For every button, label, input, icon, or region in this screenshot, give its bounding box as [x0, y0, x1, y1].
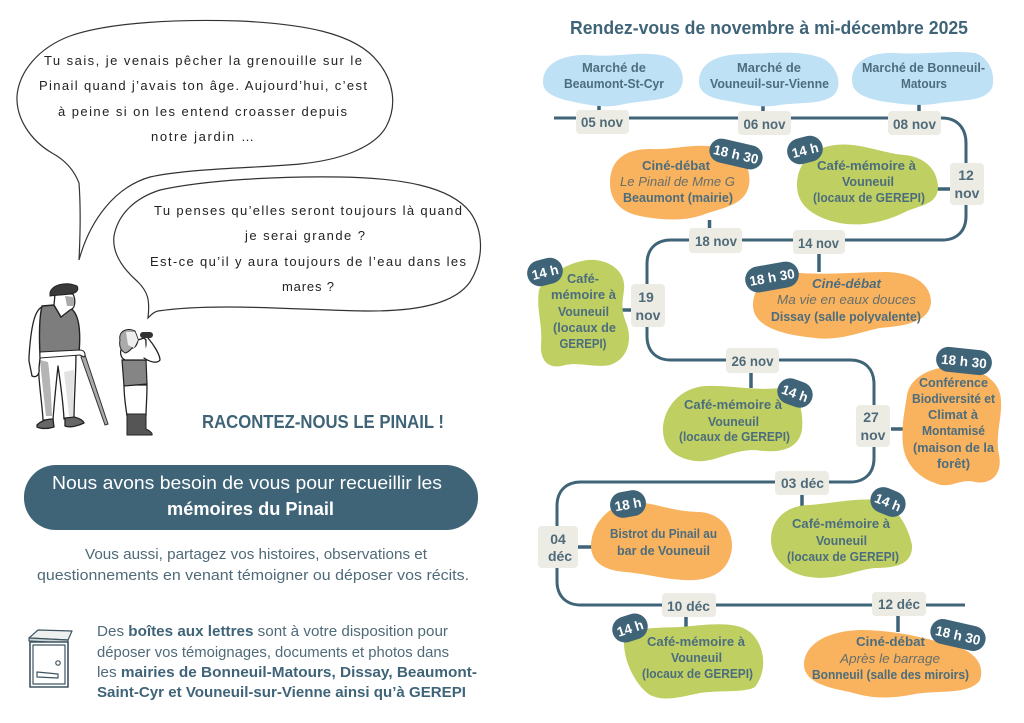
event: café-mémoire 03 déc: Café-mémoire à — [792, 516, 891, 531]
event: café-mémoire 12 nov: Vouneuil — [842, 174, 894, 189]
event: café-mémoire 03 déc: (locaux de GEREPI) — [787, 549, 899, 564]
date labels: déc — [548, 548, 572, 564]
event: ciné-débat Le Pinail de Mme G: 18 h 30 — [712, 142, 760, 167]
date labels: 05 nov — [581, 114, 623, 130]
date labels: 03 déc — [781, 475, 824, 491]
event: marché de Vouneuil: Vouneuil-sur-Vienne — [710, 76, 829, 91]
icon: letter box — [29, 630, 72, 687]
date labels: 12 déc — [878, 596, 920, 612]
event: ciné-débat Après le barrage: 18 h 30 — [934, 623, 982, 648]
date labels: 10 déc — [667, 598, 710, 614]
date labels: nov — [636, 307, 661, 323]
event: ciné-débat Après le barrage: Bonneuil (salle des miroirs) — [812, 667, 969, 682]
date labels: 19 — [638, 289, 654, 305]
text block: invitation: Vous aussi, partagez vos histoires, observations et — [85, 546, 428, 563]
speech bubble: child: Est-ce qu’il y aura toujours de l’eau dans les — [150, 254, 466, 269]
event: café-mémoire 10 déc: (locaux de GEREPI) — [642, 666, 753, 681]
event: bistrot du Pinail: Bistrot du Pinail au — [610, 526, 717, 541]
date labels: nov — [955, 185, 980, 201]
event: ciné-débat Le Pinail de Mme G: Le Pinail de Mme G — [620, 174, 735, 189]
text block: letter boxes: Saint-Cyr et Vouneuil-sur-Vienne ainsi qu’à GEREPI — [97, 684, 466, 701]
event: conférence biodiversité: forêt) — [937, 456, 970, 471]
event: café-mémoire 19 nov: Café- — [567, 271, 599, 286]
panel: agenda — [524, 18, 1001, 699]
text block: invitation: questionnements en venant témoigner ou déposer vos récits. — [37, 567, 469, 584]
event: conférence biodiversité — [902, 346, 1001, 485]
event: ciné-débat Le Pinail de Mme G — [610, 136, 765, 220]
event: conférence biodiversité: 18 h 30 — [940, 352, 987, 371]
event: ciné-débat Ma vie en eaux douces: Ciné-débat — [812, 276, 882, 291]
speech bubble: child: je serai grande ? — [244, 228, 365, 243]
speech bubble: child: Tu penses qu’elles seront toujours là quand — [154, 203, 462, 218]
event: marché de Beaumont: Marché de — [582, 60, 646, 75]
event: ciné-débat Ma vie en eaux douces: Dissay (salle polyvalente) — [771, 309, 921, 324]
date labels: 04 — [550, 531, 566, 547]
banner: appeal — [24, 465, 478, 530]
illustration: old man with cane — [29, 284, 108, 428]
date labels — [538, 110, 984, 617]
speech bubble: child: mares ? — [282, 279, 334, 294]
event: café-mémoire 26 nov: Vouneuil — [708, 414, 759, 429]
event: ciné-débat Le Pinail de Mme G: Beaumont (mairie) — [623, 190, 733, 205]
event: café-mémoire 26 nov: Café-mémoire à — [684, 397, 783, 412]
date labels: nov — [861, 427, 886, 443]
event: café-mémoire 19 nov: 14 h — [530, 262, 560, 283]
text block: letter boxes — [97, 623, 477, 701]
event: café-mémoire 12 nov — [784, 133, 938, 224]
text block: invitation — [37, 546, 469, 584]
speech bubble: child — [114, 177, 481, 318]
event: café-mémoire 12 nov: 14 h — [790, 140, 820, 161]
event: café-mémoire 19 nov — [524, 255, 629, 366]
date labels: 14 nov — [798, 235, 839, 251]
event: bistrot du Pinail: bar de Vouneuil — [617, 543, 710, 558]
event: conférence biodiversité: Biodiversité et — [912, 391, 996, 406]
text block: letter boxes: déposer vos témoignages, documents et photos dans — [97, 644, 449, 661]
event: marché de Vouneuil — [699, 53, 838, 106]
date labels: 12 — [958, 167, 974, 183]
event: ciné-débat Ma vie en eaux douces: Ma vie en eaux douces — [777, 292, 917, 307]
text block: letter boxes: les mairies de Bonneuil-Matours, Dissay, Beaumont- — [97, 664, 477, 681]
heading: call to action: RACONTEZ-NOUS LE PINAIL ! — [202, 412, 444, 432]
speech bubble: grandfather: Pinail quand j’avais ton âge. Aujourd’hui, c’est — [39, 78, 367, 93]
event: café-mémoire 26 nov: 14 h — [780, 382, 810, 405]
event: marché de Beaumont — [543, 54, 683, 106]
event: bistrot du Pinail: 18 h — [613, 495, 643, 514]
event: ciné-débat Après le barrage: Après le barrage — [839, 651, 940, 666]
event: ciné-débat Ma vie en eaux douces: 18 h 30 — [748, 266, 796, 289]
event: ciné-débat Ma vie en eaux douces — [743, 260, 931, 339]
illustration: girl with binoculars — [120, 329, 160, 435]
event: café-mémoire 10 déc: Vouneuil — [671, 650, 722, 665]
event: marché de Bonneuil — [852, 52, 993, 105]
timeline path — [554, 118, 966, 605]
event: café-mémoire 19 nov: GEREPI) — [560, 336, 606, 351]
event: café-mémoire 10 déc: 14 h — [615, 617, 645, 640]
speech bubble: grandfather: à peine si on les entend croasser depuis — [58, 104, 348, 119]
event: café-mémoire 19 nov: (locaux de — [553, 320, 616, 335]
banner: appeal: Nous avons besoin de vous pour recueillir les — [52, 473, 442, 493]
date labels: 06 nov — [744, 116, 786, 132]
event: marché de Vouneuil: Marché de — [737, 60, 801, 75]
event: café-mémoire 12 nov: (locaux de GEREPI) — [813, 190, 925, 205]
event: café-mémoire 19 nov: Vouneuil — [558, 304, 609, 319]
event: conférence biodiversité: Montamisé — [922, 423, 985, 438]
event: café-mémoire 03 déc: 14 h — [872, 490, 903, 514]
date labels: 26 nov — [732, 353, 774, 369]
event: ciné-débat Le Pinail de Mme G: Ciné-débat — [642, 158, 711, 173]
speech bubble: grandfather — [17, 20, 393, 260]
speech bubble: grandfather: Tu sais, je venais pêcher la grenouille sur le — [44, 53, 362, 68]
event: marché de Bonneuil: Marché de Bonneuil- — [862, 60, 985, 75]
event: café-mémoire 19 nov: mémoire à — [551, 287, 617, 302]
timeline connectors — [578, 103, 950, 632]
panel: left side testimonial — [17, 20, 481, 701]
event: café-mémoire 03 déc: Vouneuil — [816, 533, 867, 548]
event: café-mémoire 03 déc — [771, 483, 912, 578]
event: café-mémoire 26 nov: (locaux de GEREPI) — [679, 429, 790, 444]
event: conférence biodiversité: Conférence — [919, 375, 988, 390]
event: café-mémoire 26 nov — [663, 375, 816, 461]
event: café-mémoire 12 nov: Café-mémoire à — [817, 158, 917, 173]
speech bubble: grandfather: notre jardin … — [151, 129, 254, 144]
event: conférence biodiversité: (maison de la — [913, 440, 995, 455]
event: marché de Bonneuil: Matours — [901, 76, 947, 91]
date labels: 08 nov — [893, 116, 936, 132]
date labels: 18 nov — [695, 233, 737, 249]
event: bistrot du Pinail — [591, 488, 732, 580]
banner: appeal: mémoires du Pinail — [167, 499, 334, 519]
text block: letter boxes: Des boîtes aux lettres sont à votre disposition pour — [97, 623, 448, 640]
event: ciné-débat Après le barrage — [804, 617, 988, 698]
event: ciné-débat Après le barrage: Ciné-débat — [856, 634, 926, 649]
title: Rendez-vous de novembre à mi-décembre 2025 — [570, 18, 968, 38]
event: café-mémoire 10 déc — [609, 610, 763, 699]
event: café-mémoire 10 déc: Café-mémoire à — [647, 634, 746, 649]
event: marché de Beaumont: Beaumont-St-Cyr — [564, 76, 664, 91]
event: conférence biodiversité: Climat à — [928, 407, 979, 422]
date labels: 27 — [863, 409, 879, 425]
